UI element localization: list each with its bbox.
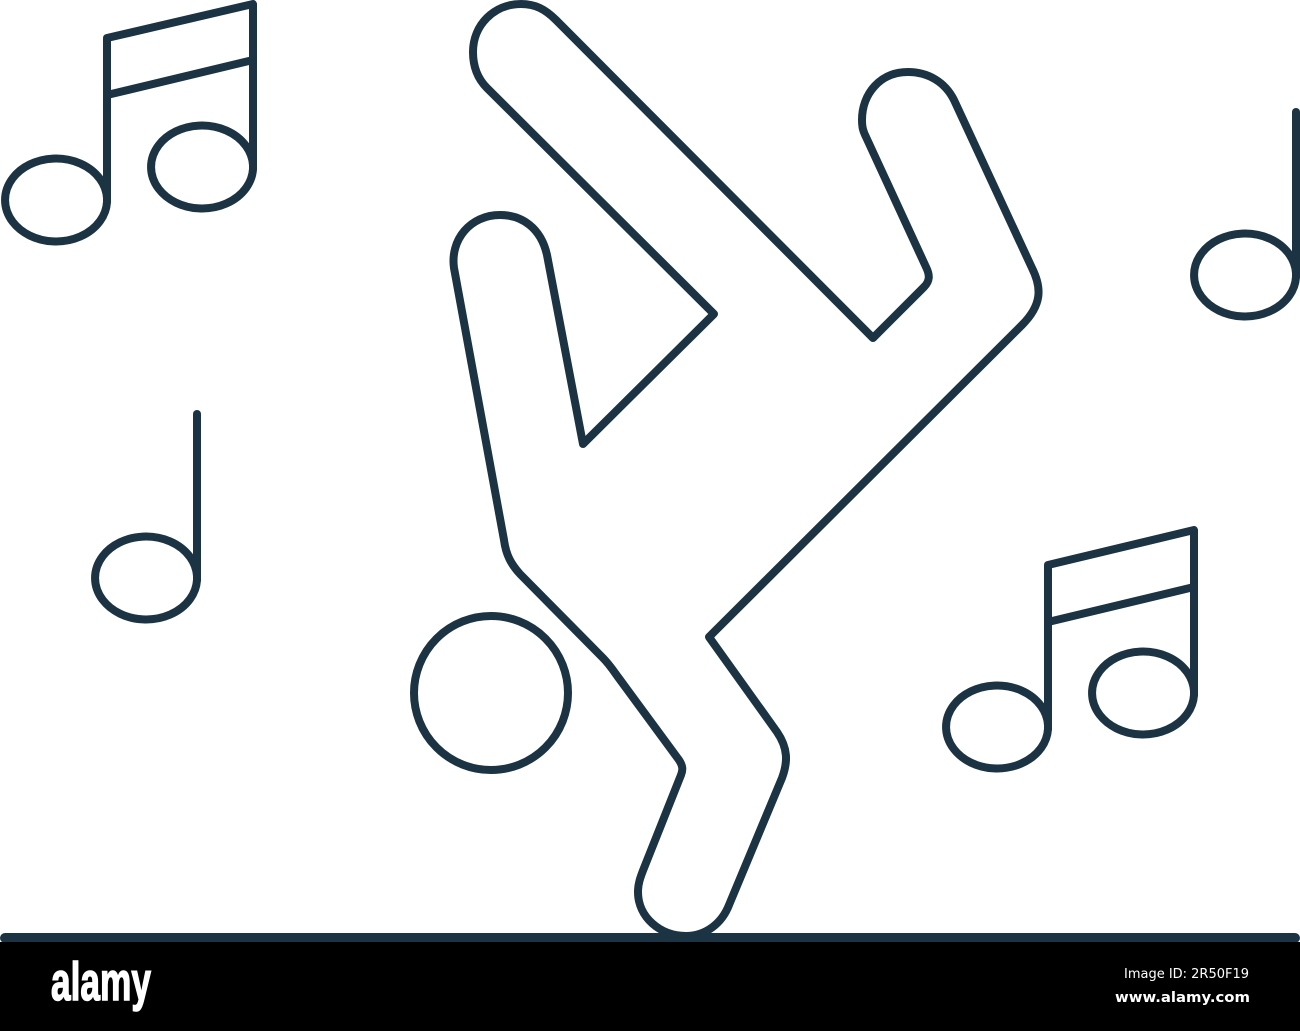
icon: single music note left — [95, 414, 197, 619]
icon: double music note top left — [5, 4, 253, 241]
image id text: Image ID: 2R50F19 — [1124, 967, 1249, 982]
icon: breakdancer body — [453, 4, 1039, 936]
icon: double music note bottom right — [946, 530, 1194, 768]
alamy logo text: alamy — [51, 952, 151, 1012]
website text: www.alamy.com — [1115, 990, 1250, 1006]
ground line — [0, 933, 1300, 943]
watermark footer bar — [0, 942, 1300, 1031]
icon: dancer head — [414, 616, 568, 770]
icon: single music note right — [1194, 112, 1296, 316]
